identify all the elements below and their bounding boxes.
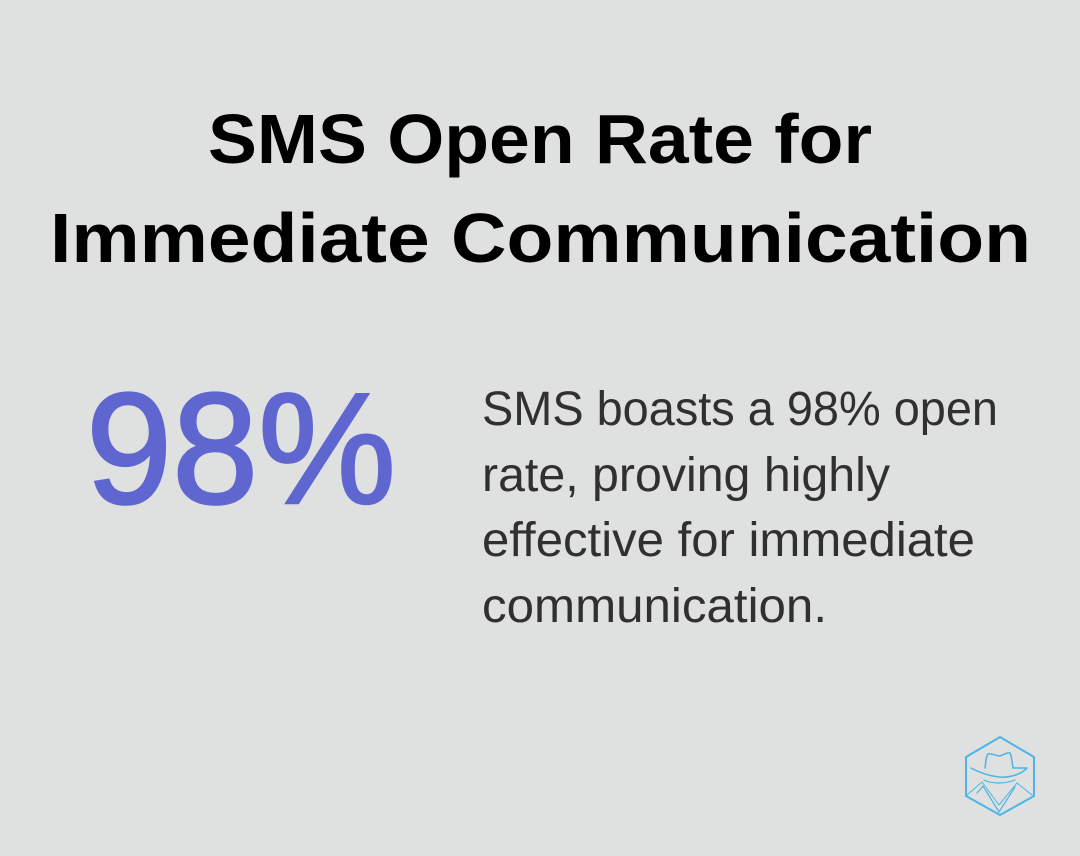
- title: SMS Open Rate for: [208, 100, 872, 178]
- big stat: 98%: 98%: [86, 361, 396, 537]
- description text: SMS boasts a 98% open: [482, 383, 998, 436]
- icon: spy logo in hexagon: [966, 737, 1034, 815]
- title: Immediate Communication: [50, 199, 1031, 277]
- title: [50, 100, 1031, 277]
- description text: [482, 383, 998, 633]
- description text: effective for immediate: [482, 514, 975, 567]
- description text: communication.: [482, 580, 827, 633]
- description text: rate, proving highly: [482, 449, 890, 502]
